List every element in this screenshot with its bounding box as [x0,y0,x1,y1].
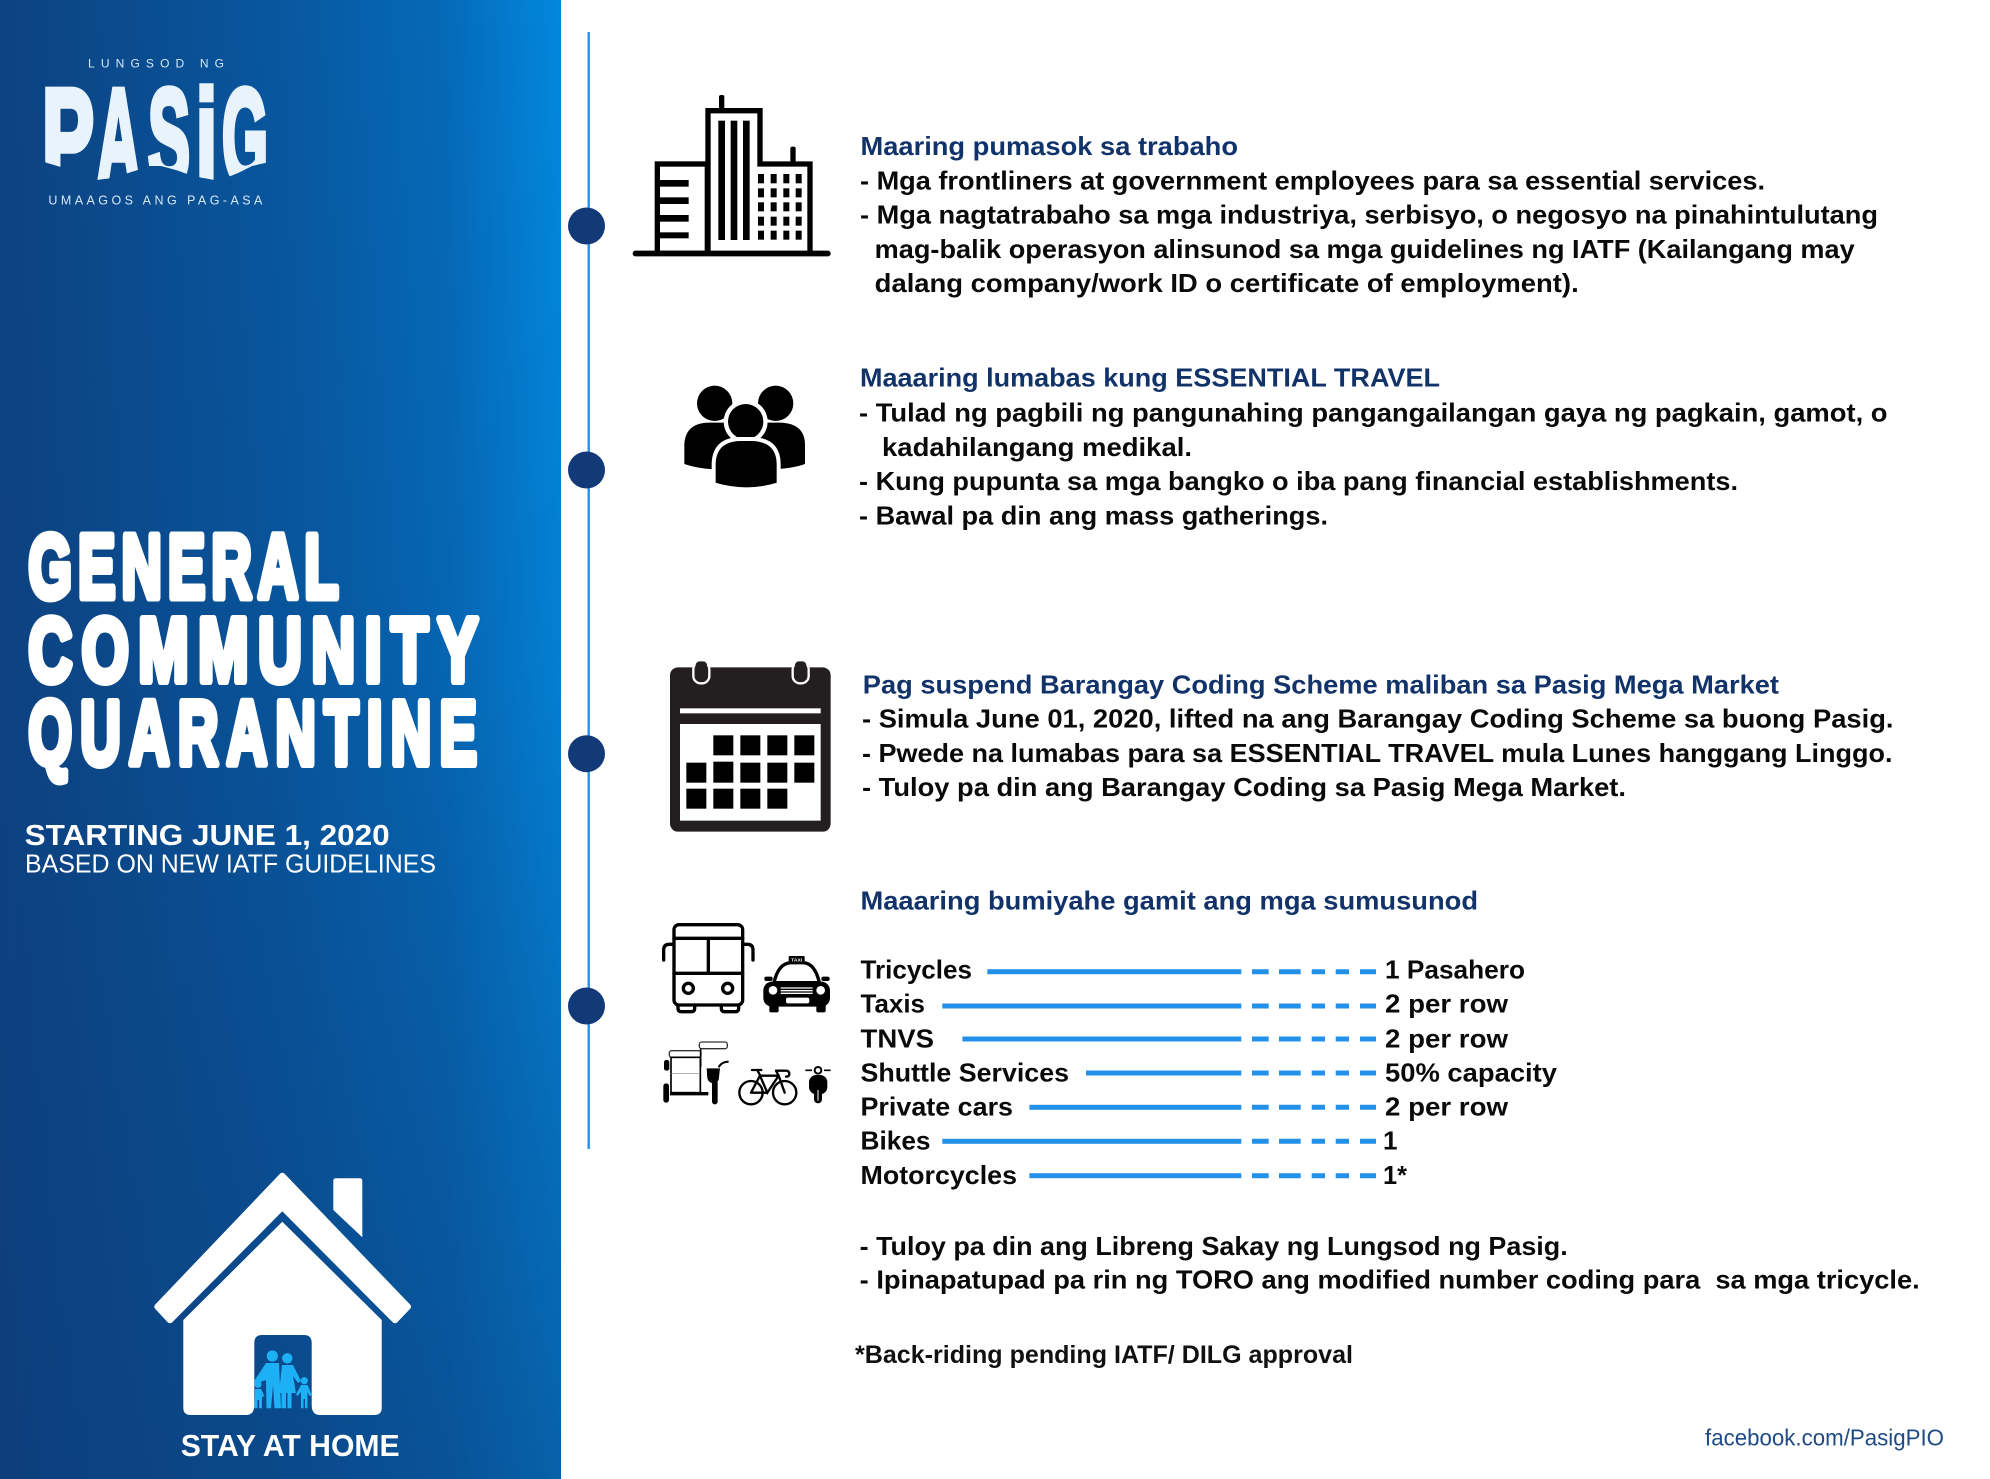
row: private cars: Private cars [860,1092,1013,1122]
section: transport [860,886,1558,1190]
heading: essential travel: Maaaring lumabas kung ESSENTIAL TRAVEL [860,363,1440,393]
row: motorcycles: 1* [1383,1160,1408,1190]
timeline dot 3 [568,735,605,772]
logo: Lungsod ng Pasig [42,57,268,212]
text: libreng sakay: - Tuloy pa din ang Libreng Sakay ng Lungsod ng Pasig. [860,1231,1568,1261]
icon: buildings [633,95,831,256]
text: travel line 4: - Bawal pa din ang mass gatherings. [859,500,1328,530]
subtitle: date: STARTING JUNE 1, 2020 [25,820,390,852]
text: coding line 2: - Pwede na lumabas para sa ESSENTIAL TRAVEL mula Lunes hanggang Linggo. [862,738,1892,768]
row: shuttle services: Shuttle Services [860,1058,1069,1088]
icon: taxi: TAXI [791,957,803,963]
credit: facebook: facebook.com/PasigPIO [1705,1425,1944,1451]
icon: transport group [663,925,831,1104]
icon: bus [664,925,753,1012]
title: General Community Quarantine: COMMUNITY [28,601,488,701]
row: tnvs: 2 per row [1385,1024,1509,1054]
logo wordmark: S [148,61,190,212]
timeline line [588,32,590,1149]
icon: scooter [805,1067,831,1103]
text: work line 3: mag-balik operasyon alinsunod sa mga guidelines ng IATF (Kailangang may [875,234,1855,264]
icon: house with family [157,1176,408,1415]
row: motorcycles: Motorcycles [860,1160,1017,1190]
section: essential travel [859,363,1888,530]
row: taxis [860,988,1509,1018]
subtitle: guidelines: BASED ON NEW IATF GUIDELINES [25,851,436,879]
row: tricycles: Tricycles [860,954,972,984]
icon: people [684,386,805,489]
icon: calendar [670,659,831,832]
logo wordmark: P [42,61,94,212]
section: work [860,131,1878,298]
text: work line 4: dalang company/work ID o certificate of employment). [875,268,1579,298]
section: barangay coding [862,669,1894,802]
panel: left blue sidebar [0,0,561,1479]
row: tricycles [860,954,1525,984]
row: bikes [860,1126,1398,1156]
logo top line: LUNGSOD NG [88,57,224,71]
heading: transport: Maaaring bumiyahe gamit ang mga sumusunod [860,886,1478,916]
row: motorcycles [860,1160,1408,1190]
house roof [157,1176,408,1320]
heading: barangay coding: Pag suspend Barangay Coding Scheme maliban sa Pasig Mega Market [863,669,1779,699]
text: number coding: - Ipinapatupad pa rin ng TORO ang modified number coding para sa mga tricycle. [860,1265,1920,1295]
house chimney [333,1178,362,1237]
row: shuttle services [860,1058,1558,1088]
row: taxis: Taxis [860,988,925,1018]
heading: work: Maaring pumasok sa trabaho [860,131,1238,161]
text: work line 1: - Mga frontliners at government employees para sa essential services. [860,165,1765,195]
row: tricycles: 1 Pasahero [1385,954,1525,984]
icon: taxi [763,956,830,1012]
timeline dot 4 [568,988,605,1024]
logo wordmark: i [196,61,217,212]
text: travel line 2: kadahilangang medikal. [882,432,1192,462]
row: taxis: 2 per row [1385,988,1509,1018]
row: bikes: Bikes [860,1126,930,1156]
icon: tricycle [663,1042,729,1104]
text: work line 2: - Mga nagtatrabaho sa mga industriya, serbisyo, o negosyo na pinahintulutang [860,200,1878,230]
logo wordmark: A [97,61,140,212]
family [254,1350,312,1408]
title: General Community Quarantine: QUARANTINE [28,682,485,783]
text: travel line 1: - Tulad ng pagbili ng pangunahing pangangailangan gaya ng pagkain, gamot, o [859,398,1888,428]
title: General Community Quarantine: GENERAL [28,516,345,617]
house body [183,1222,382,1415]
text: travel line 3: - Kung pupunta sa mga bangko o iba pang financial establishments. [859,466,1738,496]
icon: bicycle [739,1070,796,1104]
text: coding line 3: - Tuloy pa din ang Barangay Coding sa Pasig Mega Market. [862,772,1626,802]
caption: stay at home: STAY AT HOME [181,1429,400,1463]
logo tagline: UMAAGOS ANG PAG-ASA [48,193,263,207]
row: shuttle services: 50% capacity [1385,1058,1558,1088]
row: bikes: 1 [1383,1126,1398,1156]
title: General Community Quarantine [28,516,488,783]
timeline dot 2 [568,452,605,488]
row: private cars [860,1092,1509,1122]
text: G [222,61,268,212]
row: private cars: 2 per row [1385,1092,1509,1122]
timeline dot 1 [568,208,605,244]
logo wordmark [45,83,266,180]
footnote: *Back-riding pending IATF/ DILG approval [855,1341,1353,1369]
row: tnvs [860,1024,1509,1054]
row: tnvs: TNVS [860,1024,934,1054]
text: coding line 1: - Simula June 01, 2020, lifted na ang Barangay Coding Scheme sa buong Pasig. [862,704,1894,734]
